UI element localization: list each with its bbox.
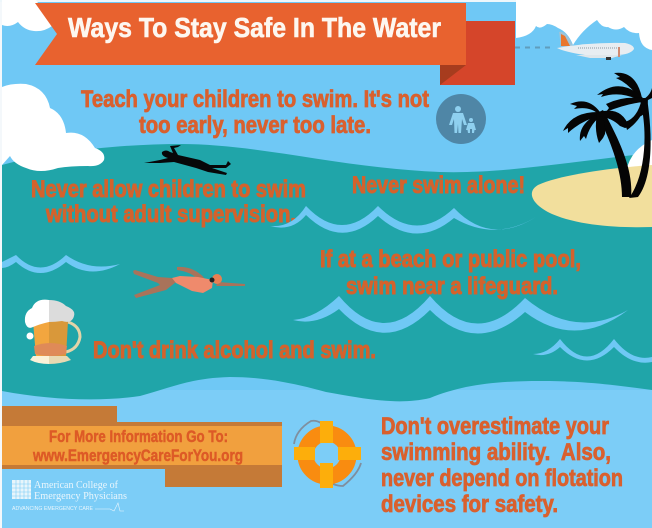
clouds: top right <box>516 0 652 50</box>
airplane <box>515 32 634 60</box>
logo: American College of Emergency Physicians: Emergency Physicians <box>34 491 127 502</box>
wave: small right <box>533 339 652 363</box>
text: overestimate: Don't overestimate your <box>381 413 609 440</box>
text: supervision: Never allow children to swim <box>31 176 306 203</box>
text: lifeguard <box>320 246 581 300</box>
text: teach children <box>81 86 429 139</box>
text: teach children: Teach your children to swim. It's not <box>81 86 429 113</box>
ribbon: more information: www.EmergencyCareForYou.org <box>32 446 243 465</box>
icon: adult and child <box>436 94 486 144</box>
ribbon: more information <box>2 406 282 487</box>
banner back <box>440 21 515 85</box>
text: supervision: without adult supervision. <box>45 201 296 228</box>
text: lifeguard: If at a beach or public pool, <box>320 246 581 273</box>
text: alcohol: Don't drink alcohol and swim. <box>93 337 376 364</box>
text: overestimate: devices for safety. <box>381 491 558 518</box>
text: supervision <box>31 176 306 228</box>
text: overestimate <box>381 413 623 518</box>
logo: American College of Emergency Physicians <box>12 480 127 512</box>
text: teach children: too early, never too late. <box>139 112 371 139</box>
text: overestimate: swimming ability. Also, <box>381 439 611 466</box>
cloud: top left <box>2 0 52 31</box>
logo: American College of Emergency Physicians: American College of <box>34 480 119 491</box>
text: never swim alone: Never swim alone! <box>352 172 525 199</box>
banner front <box>35 3 466 65</box>
cloud: left <box>2 84 104 171</box>
water <box>2 144 652 401</box>
wave: large middle <box>293 296 628 334</box>
icon: beer mug <box>25 300 80 364</box>
wave: left <box>2 255 120 273</box>
icon: life ring <box>294 421 361 488</box>
swimmer: woman <box>133 267 245 298</box>
swimmer: black silhouette <box>144 145 231 175</box>
logo: American College of Emergency Physicians: ADVANCING EMERGENCY CARE <box>12 506 94 512</box>
text: lifeguard: swim near a lifeguard. <box>346 273 558 300</box>
ribbon: more information: For More Information Go To: <box>49 427 228 446</box>
island <box>532 140 652 227</box>
wave: upper middle <box>270 206 536 234</box>
title: Ways To Stay Safe In The Water <box>68 12 441 43</box>
palm trees <box>563 73 652 198</box>
